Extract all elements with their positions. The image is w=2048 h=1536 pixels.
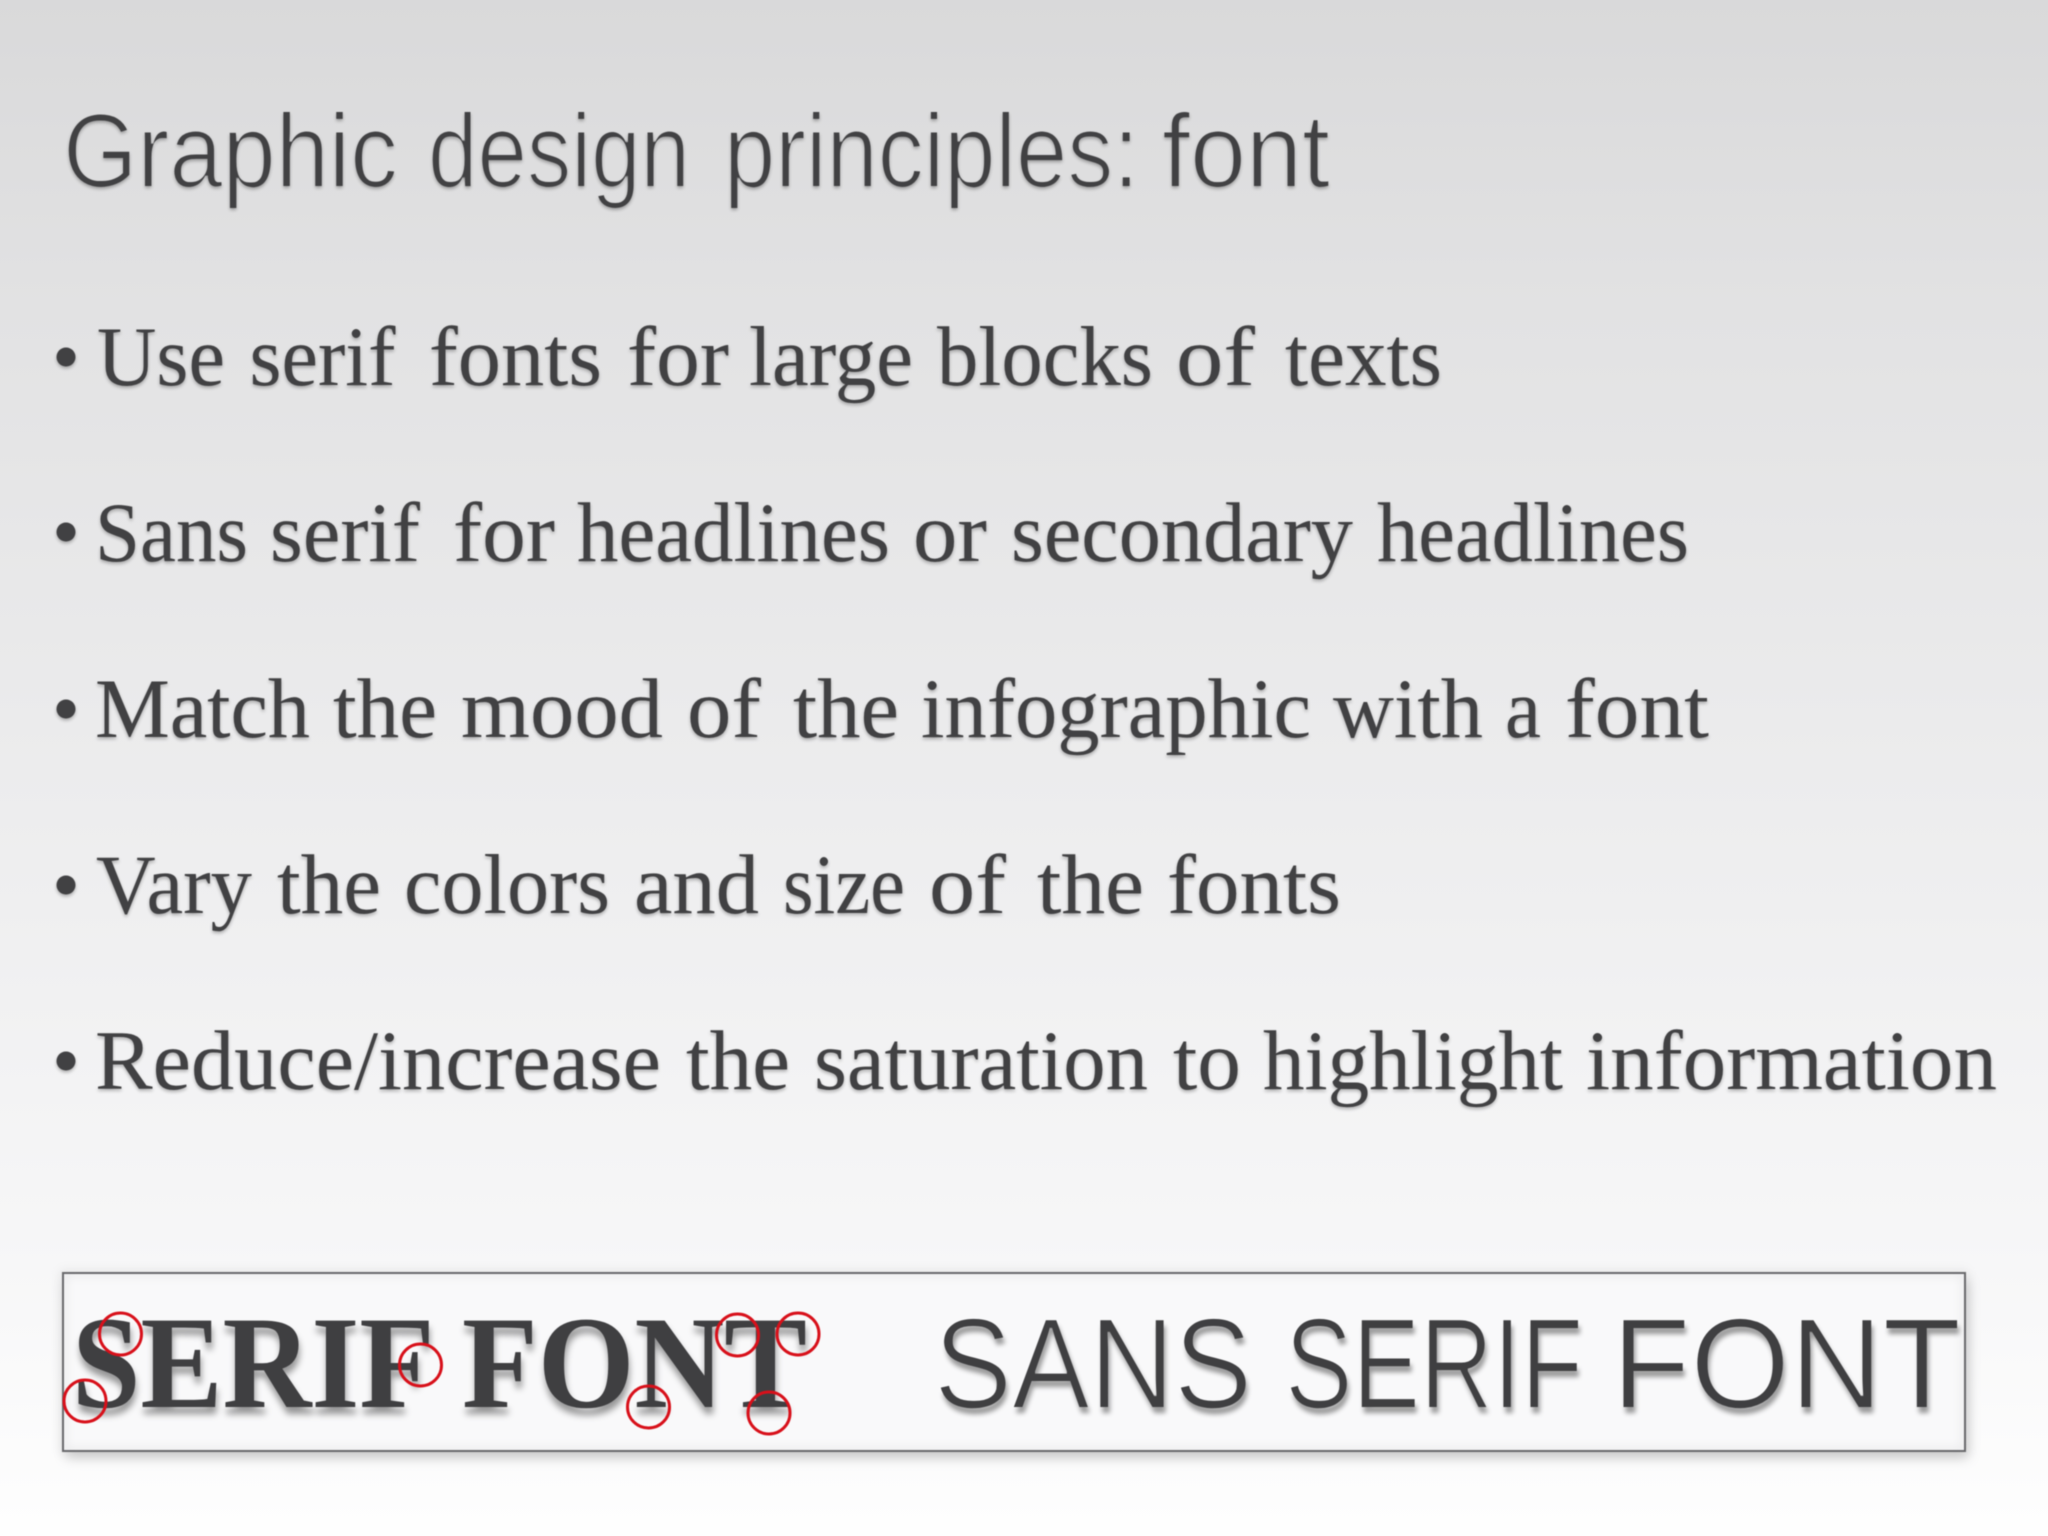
title: principles: [724,93,1139,210]
bullet 3: match the mood: the [793,662,899,756]
bullet 4: vary colors and size: colors [404,838,610,932]
bullet 2: sans serif: secondary [1011,486,1353,580]
bullet 2: sans serif: headlines [1377,486,1689,580]
bullet 3: match the mood: font [1565,662,1709,756]
bullet 3: match the mood: a [1505,662,1541,756]
bullet 2: sans serif: serif [270,486,421,580]
bullet 3: match the mood: mood [461,662,663,756]
bullet 1: serif fonts: blocks [937,310,1153,404]
bullet 5: saturation [56,1014,1997,1108]
serif font sample: SERIF [72,1289,430,1436]
bullet 1: serif fonts: of [1176,310,1256,404]
bullet 1: serif fonts: serif [250,310,396,404]
bullet 4: vary colors and size: fonts [1167,838,1341,932]
font comparison box [63,1273,1965,1451]
bullet 4: vary colors and size: of [929,838,1007,932]
bullet 2: sans serif: headlines [577,486,890,580]
bullet 5: saturation: saturation [814,1014,1148,1108]
bullet 4: vary colors and size: the [277,838,381,932]
bullet 1: serif fonts: texts [1285,310,1442,404]
sans serif font sample: SANS [934,1292,1252,1436]
bullet 2: sans serif: Sans [95,486,248,580]
serif font sample: FONT [462,1289,807,1436]
bullet 5: saturation: highlight [1263,1014,1563,1108]
bullet 1: serif fonts: fonts [429,310,602,404]
title: design [428,93,690,210]
bullet 2: sans serif: or [913,486,987,580]
title: font [1162,93,1330,210]
sans serif font sample: FONT [1612,1292,1961,1436]
bullet 4: vary colors and size: and [634,838,759,932]
bullet 3: match the mood: of [687,662,762,756]
bullet 2: sans serif: for [453,486,555,580]
title: Graphic [63,93,398,210]
red circles marking serifs [64,1313,819,1434]
bullet 3: match the mood: infographic [921,662,1311,756]
bullet 1: serif fonts: Use [97,310,225,404]
bullet 5: saturation: the [686,1014,790,1108]
sans serif font sample: SERIF [1285,1292,1583,1436]
bullet 3: match the mood: with [1333,662,1483,756]
bullet 1: serif fonts: for [627,310,729,404]
bullet 4: vary colors and size: the [1037,838,1144,932]
bullet 4: vary colors and size: Vary [96,838,252,932]
bullet 1: serif fonts: large [749,310,913,404]
bullet 5: saturation: to [1173,1014,1241,1108]
bullet 4: vary colors and size [56,838,1341,932]
bullet 5: saturation: Reduce/increase [95,1014,661,1108]
title [63,93,1330,210]
bullet 1: serif fonts [56,310,1442,404]
sans serif font sample [934,1292,1961,1436]
bullet 3: match the mood [56,662,1709,756]
bullet 4: vary colors and size: size [783,838,905,932]
bullet 2: sans serif [56,486,1689,580]
serif font sample [72,1289,807,1436]
bullet 3: match the mood: the [333,662,437,756]
bullet 5: saturation: information [1586,1014,1997,1108]
bullet list [56,310,1997,1108]
bullet 3: match the mood: Match [95,662,310,756]
box frame [63,1273,1965,1451]
